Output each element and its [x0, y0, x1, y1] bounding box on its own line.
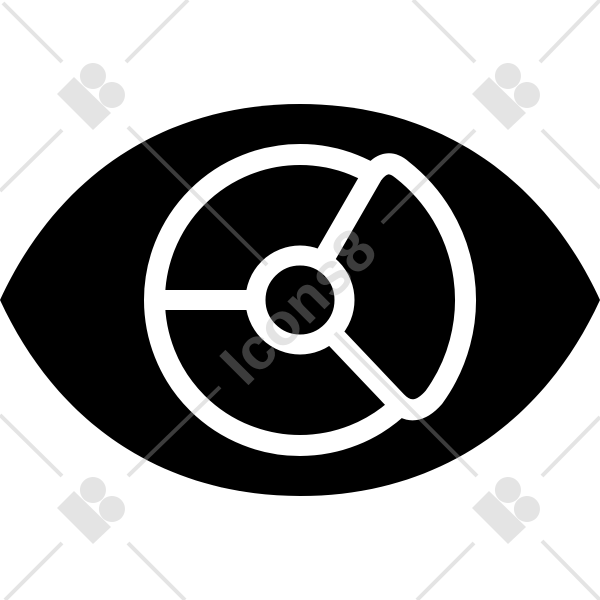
icon: eye	[0, 104, 600, 496]
watermark logo: bottom right	[472, 477, 540, 544]
eye silhouette	[0, 104, 600, 496]
left spoke	[155, 290, 260, 310]
watermark logo: top right	[472, 63, 540, 130]
watermark logo: top left	[57, 63, 125, 130]
watermark text: Icons8	[207, 215, 389, 397]
pupil hub	[256, 256, 344, 344]
watermark logo: bottom left	[57, 477, 125, 544]
iris ring	[154, 154, 446, 446]
enlarged pie sector	[300, 164, 466, 410]
